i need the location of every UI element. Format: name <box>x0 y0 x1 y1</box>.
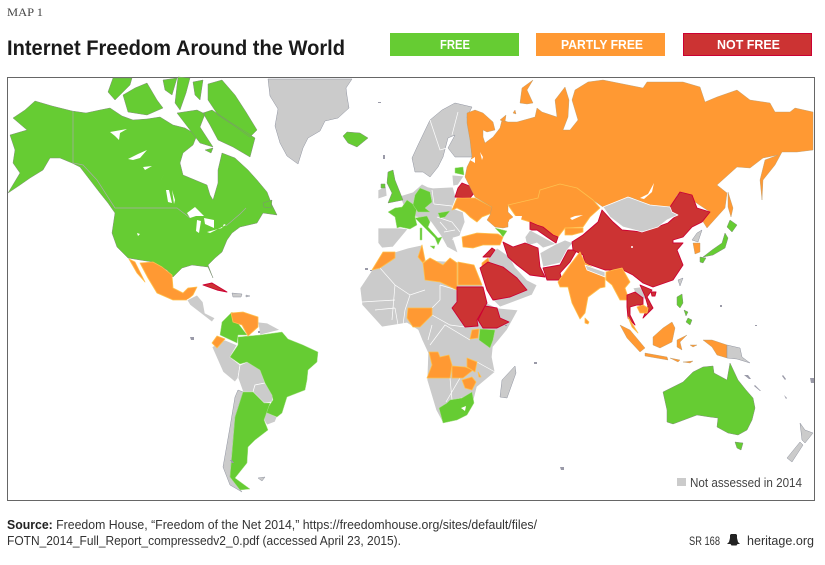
source note: Source: Freedom House, “Freedom of the Net 2014,” https://freedomhouse.org/sites/default/files/ <box>7 517 565 532</box>
Afghanistan <box>540 240 573 267</box>
map number label: MAP 1 <box>7 5 43 19</box>
Zambia <box>452 366 473 378</box>
Pakistan <box>543 250 577 280</box>
Mongolia <box>603 197 678 232</box>
Japan <box>700 220 737 263</box>
Pacific islands <box>190 102 814 470</box>
Cuba <box>203 283 227 292</box>
Turkmenistan <box>525 230 556 248</box>
Belarus <box>455 183 475 198</box>
Libya <box>423 258 457 290</box>
Greenland <box>268 79 352 164</box>
Jordan <box>482 258 490 267</box>
Central America and Caribbean <box>187 283 250 322</box>
China <box>572 192 710 287</box>
legend: free <box>390 33 519 56</box>
North America <box>8 77 277 278</box>
Nigeria <box>407 308 432 327</box>
South Asia <box>558 252 630 324</box>
Southeast Asia <box>620 278 750 363</box>
East Asia <box>692 220 737 263</box>
Syria <box>483 248 495 257</box>
Iran <box>503 242 545 277</box>
not assessed key: Not assessed in 2014 <box>690 475 802 490</box>
Kenya <box>479 329 495 348</box>
Saudi Arabia <box>480 262 527 300</box>
Ethiopia <box>478 306 509 328</box>
legend: partly free <box>536 33 665 56</box>
legend: free: FREE <box>440 38 470 52</box>
Turkey <box>462 233 503 248</box>
Georgia <box>495 228 507 237</box>
Central Asia <box>508 184 600 267</box>
source note: FOTN_2014_Full_Report_compressedv2_0.pdf (accessed April 23, 2015). <box>7 533 401 548</box>
Uzbekistan <box>530 222 558 243</box>
Uganda <box>470 329 479 339</box>
legend <box>390 33 812 56</box>
Australia <box>663 363 755 450</box>
map panel <box>8 77 814 500</box>
Morocco <box>372 252 395 270</box>
Iceland <box>343 132 368 147</box>
title: Internet Freedom Around the World <box>7 37 345 60</box>
South America <box>212 312 318 492</box>
lakes <box>110 129 226 236</box>
Middle East <box>462 228 577 307</box>
Ukraine <box>452 198 492 222</box>
Mexico <box>129 259 197 300</box>
Malawi <box>467 358 481 377</box>
legend: partly free: PARTLY FREE <box>561 38 643 52</box>
South Africa <box>439 392 474 423</box>
legend: not free <box>684 34 812 56</box>
Russia <box>465 80 813 228</box>
Africa base <box>360 245 518 423</box>
New Zealand <box>787 423 813 462</box>
Europe <box>378 103 492 253</box>
Sudan <box>452 287 487 327</box>
Tunisia <box>418 245 425 263</box>
Angola <box>427 352 452 378</box>
legend: not free: NOT FREE <box>717 38 780 52</box>
report number: SR 168 <box>689 534 720 548</box>
icon: liberty bell <box>727 534 740 546</box>
website: heritage.org <box>747 533 814 548</box>
Zimbabwe <box>462 377 476 390</box>
Egypt <box>458 262 482 285</box>
